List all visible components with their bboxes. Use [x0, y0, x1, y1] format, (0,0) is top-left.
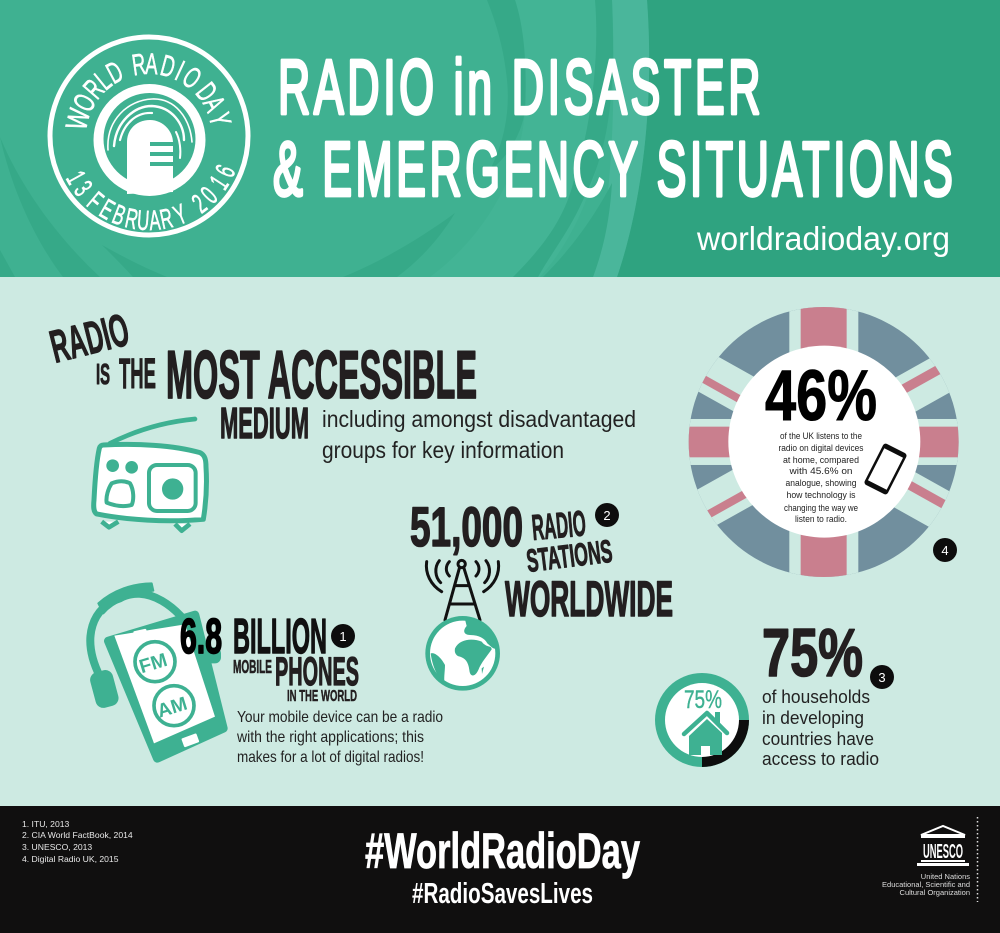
- website: worldradioday.org: [696, 220, 950, 257]
- logo: World Radio Day: 3: [68, 175, 99, 202]
- chart: union jack wheel: [688, 307, 959, 577]
- heading: radio is the most accessible medium: RADIO: [45, 303, 134, 373]
- text: UK digital listening: analogue, showing: [786, 478, 856, 489]
- stat: 6.8 billion mobile phones: [180, 610, 359, 705]
- logo: World Radio Day: [50, 37, 248, 236]
- text: UK digital listening: of the UK listens to the: [780, 431, 862, 442]
- logo: World Radio Day: O: [67, 89, 103, 117]
- icon: globe: [425, 616, 500, 691]
- text: UK digital listening: how technology is: [786, 490, 856, 501]
- logo: World Radio Day: D: [189, 77, 224, 108]
- stat: 6.8 billion mobile phones: 6.8: [180, 610, 222, 664]
- logo: World Radio Day: A: [145, 47, 159, 81]
- chart: 75% donut with house: 75%: [684, 686, 722, 714]
- text: households: of households: [762, 686, 870, 707]
- badge: 4: [933, 538, 957, 562]
- text: UK digital listening: with 45.6% on: [788, 466, 852, 477]
- sources list: 2. CIA World FactBook, 2014: [22, 830, 133, 840]
- logo: UNESCO: [882, 817, 978, 902]
- logo: World Radio Day: Y: [202, 109, 237, 130]
- stat: 51,000 radio stations worldwide: WORLDWIDE: [505, 571, 673, 627]
- logo: World Radio Day: Y: [169, 198, 191, 231]
- header banner: [0, 0, 1000, 277]
- text: MOST ACCESSIBLE: [166, 337, 477, 413]
- badge: 2: 2: [603, 508, 611, 523]
- logo: UNESCO: Cultural Organization: [900, 888, 970, 897]
- title: RADIO in DISASTER: [278, 45, 761, 131]
- chart: 75% donut with house: [655, 673, 749, 767]
- logo: UNESCO: United Nations: [921, 872, 970, 881]
- stat: 6.8 billion mobile phones: IN THE WORLD: [287, 688, 357, 705]
- icon: radio tower: [426, 560, 499, 620]
- text: households: in developing: [762, 707, 864, 728]
- FM badge: [135, 642, 175, 682]
- text: including amongst disadvantaged groups: [322, 406, 636, 463]
- logo: World Radio Day: R: [122, 202, 141, 235]
- stat: 51,000 radio stations worldwide: STATIONS: [524, 533, 614, 579]
- logo: World Radio Day: R: [130, 47, 148, 83]
- title: & EMERGENCY SITUATIONS: [273, 127, 953, 213]
- logo: World Radio Day: 2: [186, 188, 212, 219]
- icon: smartphone: [863, 443, 908, 495]
- logo: World Radio Day: O: [176, 60, 207, 96]
- FM badge: FM: [137, 650, 170, 678]
- logo: World Radio Day: 1: [60, 166, 92, 189]
- sources list: [22, 819, 133, 864]
- logo: World Radio Day: B: [108, 198, 130, 231]
- logo: World Radio Day: A: [148, 204, 162, 236]
- logo: World Radio Day: R: [77, 73, 111, 105]
- text: mobile device can be a radio: makes for a lot of digital radios!: [237, 749, 424, 766]
- icon: radio: [94, 419, 207, 531]
- logo: World Radio Day: U: [136, 204, 150, 236]
- logo: World Radio Day: L: [89, 64, 118, 97]
- badge: 1: [331, 624, 355, 648]
- text: mobile device can be a radio: [236, 709, 443, 766]
- text: PHONES: [275, 650, 359, 694]
- text: UK digital listening: [778, 431, 864, 525]
- logo: World Radio Day: I: [170, 55, 189, 88]
- sources list: 4. Digital Radio UK, 2015: [22, 854, 119, 864]
- stat: 6.8 billion mobile phones: MOBILE: [233, 657, 272, 677]
- icon: phone with headphones, FM AM: [88, 583, 223, 758]
- heading: radio is the most accessible medium: MEDIUM: [220, 399, 309, 448]
- AM badge: AM: [155, 694, 190, 722]
- logo: World Radio Day: E: [95, 193, 120, 226]
- AM badge: [154, 686, 194, 726]
- text: households: [762, 686, 879, 769]
- icon: house: [684, 712, 727, 755]
- title: [273, 45, 953, 213]
- logo: World Radio Day: D: [157, 49, 179, 85]
- hashtag: WorldRadioDay: #WorldRadioDay: [365, 823, 640, 879]
- badge: 1: 1: [339, 629, 347, 644]
- logo: World Radio Day: 0: [194, 181, 224, 209]
- stat: 46%: 46%: [765, 357, 877, 436]
- heading: radio is the most accessible medium: THE: [119, 350, 156, 398]
- hashtag: RadioSavesLives: #RadioSavesLives: [412, 878, 593, 910]
- text: UK digital listening: at home, compared: [783, 455, 859, 466]
- sources list: 1. ITU, 2013: [22, 819, 70, 829]
- text: UK digital listening: changing the way we: [784, 503, 858, 514]
- logo: UNESCO: Educational, Scientific and: [882, 880, 970, 889]
- text: including amongst disadvantaged groups: groups for key information: [322, 437, 564, 463]
- badge: 2: [595, 503, 619, 527]
- badge: 3: 3: [878, 670, 886, 685]
- footer: [0, 806, 1000, 933]
- sources list: 3. UNESCO, 2013: [22, 842, 92, 852]
- logo: World Radio Day: 1: [203, 170, 235, 195]
- logo: World Radio Day: A: [196, 91, 232, 117]
- heading: radio is the most accessible medium: IS: [96, 359, 110, 391]
- text: households: countries have: [762, 728, 874, 749]
- text: UK digital listening: radio on digital devices: [778, 443, 864, 454]
- text: mobile device can be a radio: Your mobile device can be a radio: [237, 709, 443, 726]
- badge: 4: 4: [941, 543, 949, 558]
- text: including amongst disadvantaged groups: including amongst disadvantaged: [322, 406, 636, 432]
- logo: World Radio Day: R: [157, 202, 176, 235]
- text: UK digital listening: listen to radio.: [795, 514, 847, 525]
- logo: World Radio Day: W: [59, 105, 97, 133]
- text: mobile device can be a radio: with the right applications; this: [236, 729, 424, 746]
- logo: World Radio Day: F: [81, 185, 110, 216]
- stat: 6.8 billion mobile phones: BILLION: [233, 610, 327, 664]
- logo: World Radio Day: D: [101, 55, 129, 91]
- heading: radio is the most accessible medium: [45, 303, 477, 448]
- logo: World Radio Day: 6: [209, 160, 241, 182]
- stat: 51,000 radio stations worldwide: 51,000: [410, 495, 523, 558]
- stat: 75%: 75%: [762, 615, 863, 691]
- stat: 51,000 radio stations worldwide: RADIO: [530, 502, 587, 548]
- stat: 51,000 radio stations worldwide: [410, 495, 673, 627]
- text: households: access to radio: [762, 748, 879, 769]
